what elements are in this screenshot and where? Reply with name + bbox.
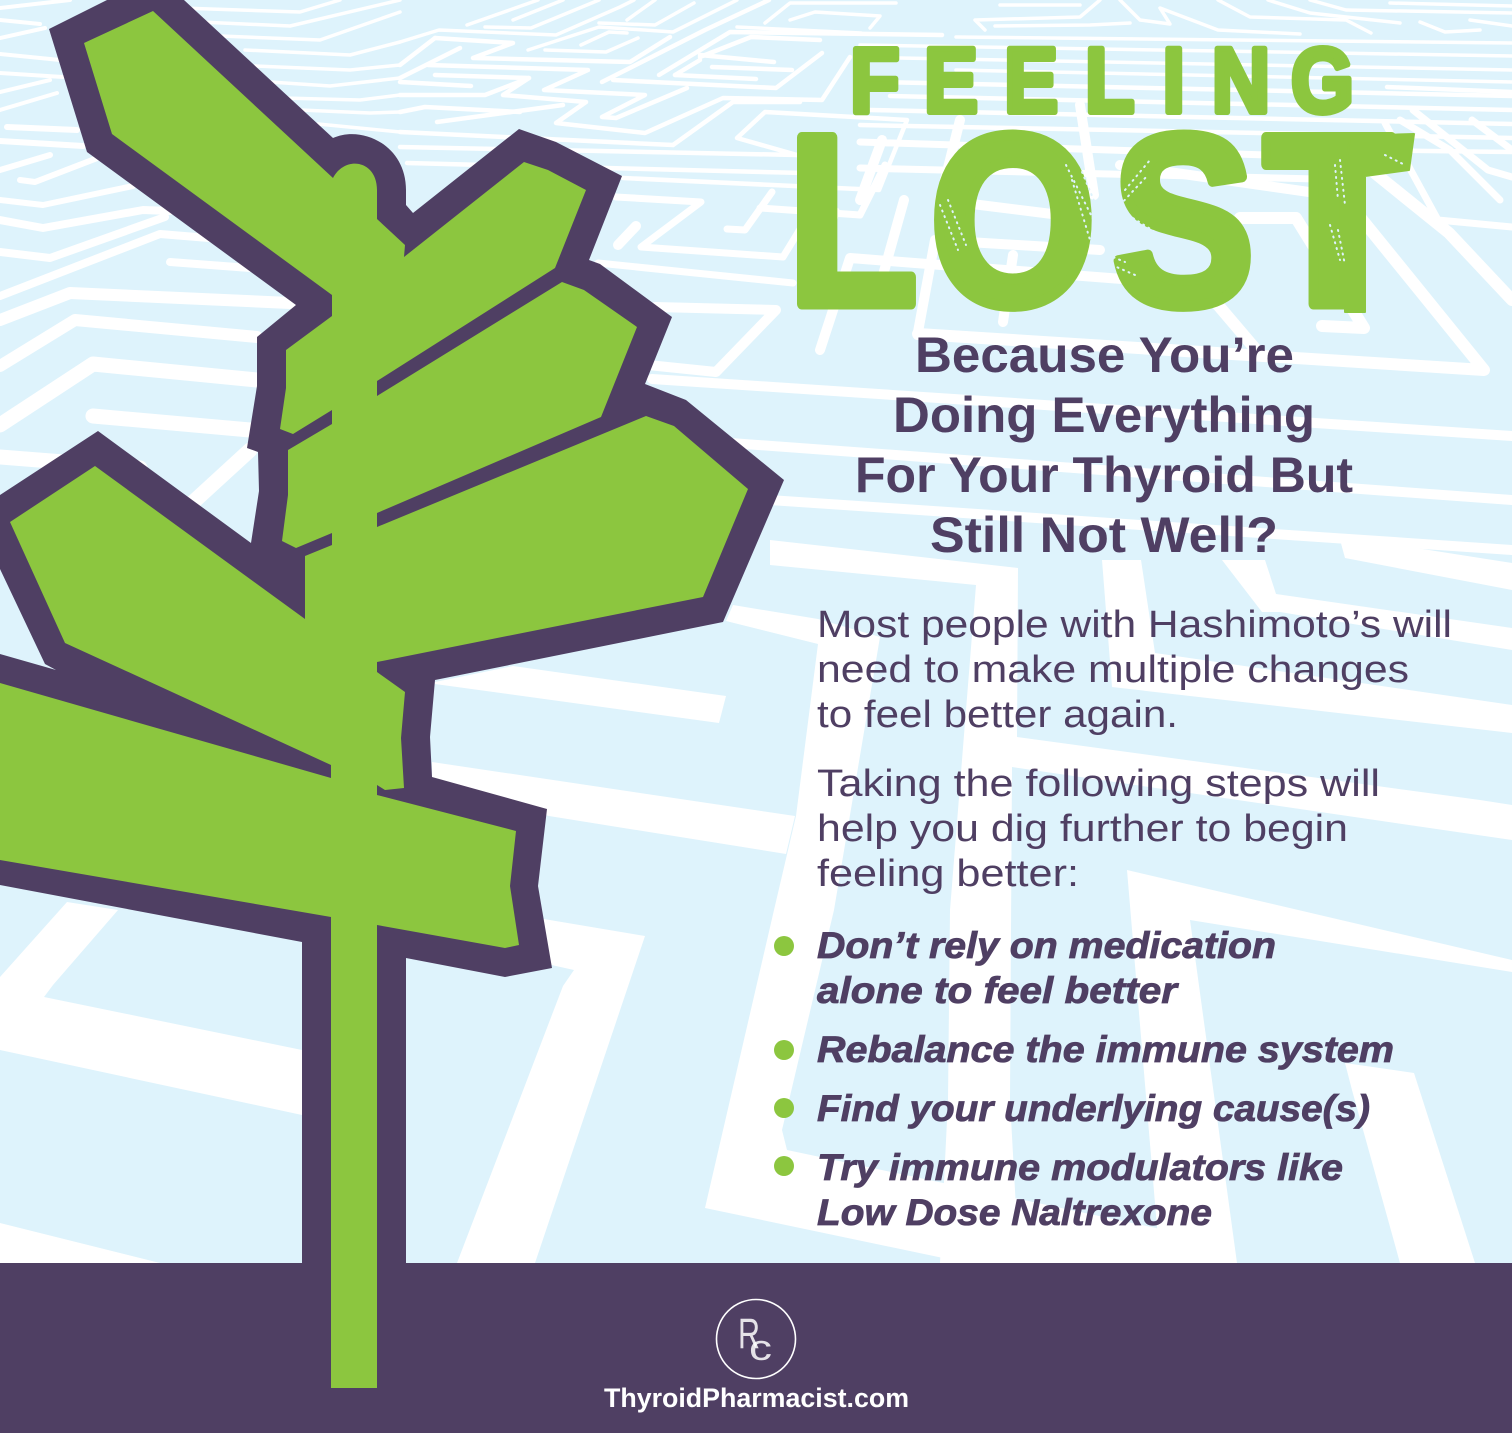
bullet text: Low Dose Naltrexone — [817, 1192, 1212, 1233]
heading: Doing Everything — [893, 387, 1315, 443]
title: FEELING LOST — [788, 30, 1414, 356]
steps paragraph: Taking the following steps will — [817, 763, 1380, 805]
footer website: ThyroidPharmacist.com — [604, 1383, 909, 1413]
bullet text — [817, 925, 1394, 1233]
bullet markers — [774, 936, 794, 1176]
footer logo: R — [738, 1310, 760, 1358]
bullet text: alone to feel better — [817, 970, 1180, 1011]
bullet text: Try immune modulators like — [817, 1147, 1343, 1188]
footer band — [0, 1263, 1512, 1433]
intro paragraph: need to make multiple changes — [817, 649, 1409, 691]
footer logo — [716, 1300, 796, 1378]
intro paragraph — [817, 604, 1452, 736]
heading: Still Not Well? — [930, 507, 1278, 563]
upper right field — [860, 0, 1512, 82]
title word: LOST: LOST — [788, 86, 1394, 356]
heading: Because You’re — [915, 327, 1294, 383]
bullet text: Rebalance the immune system — [817, 1029, 1394, 1070]
heading: For Your Thyroid But — [855, 447, 1353, 503]
steps paragraph — [817, 763, 1380, 895]
footer logo: c — [749, 1327, 772, 1368]
intro paragraph: Most people with Hashimoto’s will — [817, 604, 1452, 646]
steps paragraph: feeling better: — [817, 853, 1079, 895]
steps paragraph: help you dig further to begin — [817, 808, 1348, 850]
bullet text: Don’t rely on medication — [817, 925, 1276, 966]
intro paragraph: to feel better again. — [817, 694, 1178, 736]
title grunge speckles — [940, 155, 1405, 275]
heading — [855, 327, 1353, 563]
mid and upper maze lines — [0, 0, 1512, 550]
large lower maze bands — [0, 536, 1512, 1263]
signpost dark outline — [0, 0, 784, 1270]
bullet text: Find your underlying cause(s) — [817, 1088, 1370, 1129]
title word: FEELING: FEELING — [850, 30, 1354, 132]
top centre field — [180, 0, 896, 132]
bullet list — [774, 925, 1394, 1233]
signpost — [0, 0, 784, 1388]
far left field — [0, 364, 257, 505]
signpost green boards and pole — [0, 11, 748, 1388]
